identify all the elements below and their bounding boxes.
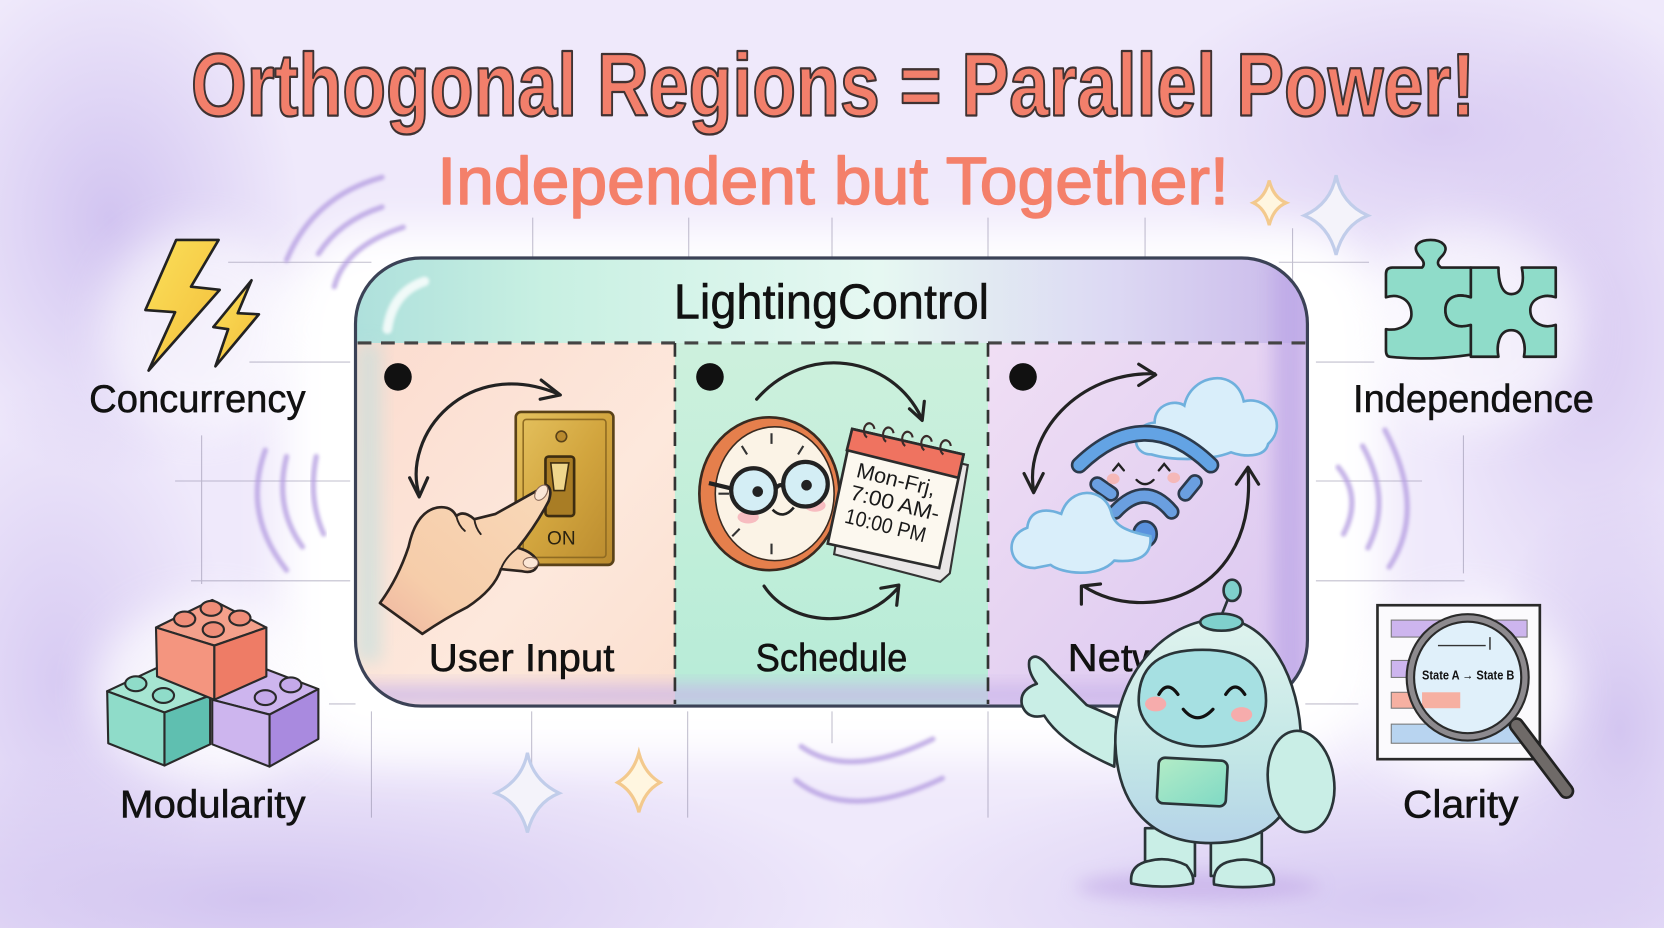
icon: lightning bolts bbox=[145, 240, 259, 371]
region: network bbox=[1009, 363, 1277, 680]
subtitle: Independent but Together! bbox=[437, 144, 1229, 219]
body bbox=[1115, 619, 1301, 843]
pointing arm bbox=[1021, 657, 1116, 767]
legs and feet bbox=[1131, 828, 1274, 887]
calendar text: Mon-Frj, bbox=[854, 459, 938, 501]
upper left arrow bbox=[1024, 364, 1156, 493]
initial state dot bbox=[696, 363, 724, 391]
white glow behind panel bbox=[96, 228, 1584, 780]
label: Concurrency: Concurrency bbox=[89, 377, 306, 421]
calendar bbox=[828, 423, 968, 582]
label: Modularity: Modularity bbox=[120, 783, 306, 827]
red block bbox=[156, 600, 266, 700]
ground shadow bbox=[1076, 872, 1320, 901]
label: Independence: Independence bbox=[1353, 377, 1594, 421]
purple block bbox=[212, 669, 318, 767]
label: Schedule bbox=[756, 636, 907, 680]
panel body bbox=[356, 258, 1307, 706]
light switch: ON bbox=[547, 529, 576, 550]
lower right arrow bbox=[1081, 467, 1259, 604]
initial state dot bbox=[384, 363, 412, 391]
eyes and smile bbox=[1159, 687, 1245, 718]
pointing hand bbox=[380, 483, 550, 634]
green block bbox=[107, 667, 210, 766]
chest panel bbox=[1157, 757, 1228, 807]
right arm bbox=[1261, 726, 1341, 837]
icon: document with magnifier bbox=[1377, 605, 1566, 791]
calendar text: 10:00 PM bbox=[842, 505, 928, 547]
lower cloud bbox=[1012, 493, 1151, 573]
panel: LightingControl state machine bbox=[356, 258, 1307, 706]
bottom arrow bbox=[764, 585, 899, 619]
top arrow bbox=[757, 363, 924, 420]
clock with glasses bbox=[699, 417, 839, 570]
face screen bbox=[1139, 650, 1266, 746]
initial state dot bbox=[1009, 363, 1037, 391]
calendar text bbox=[842, 459, 942, 547]
calendar text: 7:00 AM- bbox=[848, 482, 942, 526]
label: Clarity: Clarity bbox=[1403, 783, 1519, 827]
antenna cap bbox=[1200, 614, 1243, 631]
label: Network bbox=[1068, 636, 1221, 680]
region: user input bbox=[380, 363, 615, 680]
wifi icon with face bbox=[1079, 433, 1211, 547]
cheeks bbox=[1145, 697, 1252, 722]
icon: stacked blocks bbox=[107, 600, 318, 767]
icon: document with magnifier: State A → State B bbox=[1422, 668, 1514, 683]
icon: puzzle pieces bbox=[1386, 240, 1556, 358]
antenna ball bbox=[1224, 580, 1241, 601]
sparkles bbox=[496, 175, 1368, 832]
robot mascot bbox=[1021, 580, 1341, 901]
region: schedule bbox=[696, 363, 968, 680]
antenna bbox=[1220, 597, 1229, 618]
label: User Input bbox=[429, 636, 615, 680]
heading: LightingControl: LightingControl bbox=[674, 276, 989, 330]
light switch bbox=[516, 412, 613, 565]
cycle arrow bbox=[410, 380, 560, 497]
background grid lines bbox=[175, 218, 1464, 818]
ripple arcs bbox=[257, 177, 1407, 801]
upper cloud bbox=[1136, 378, 1277, 459]
